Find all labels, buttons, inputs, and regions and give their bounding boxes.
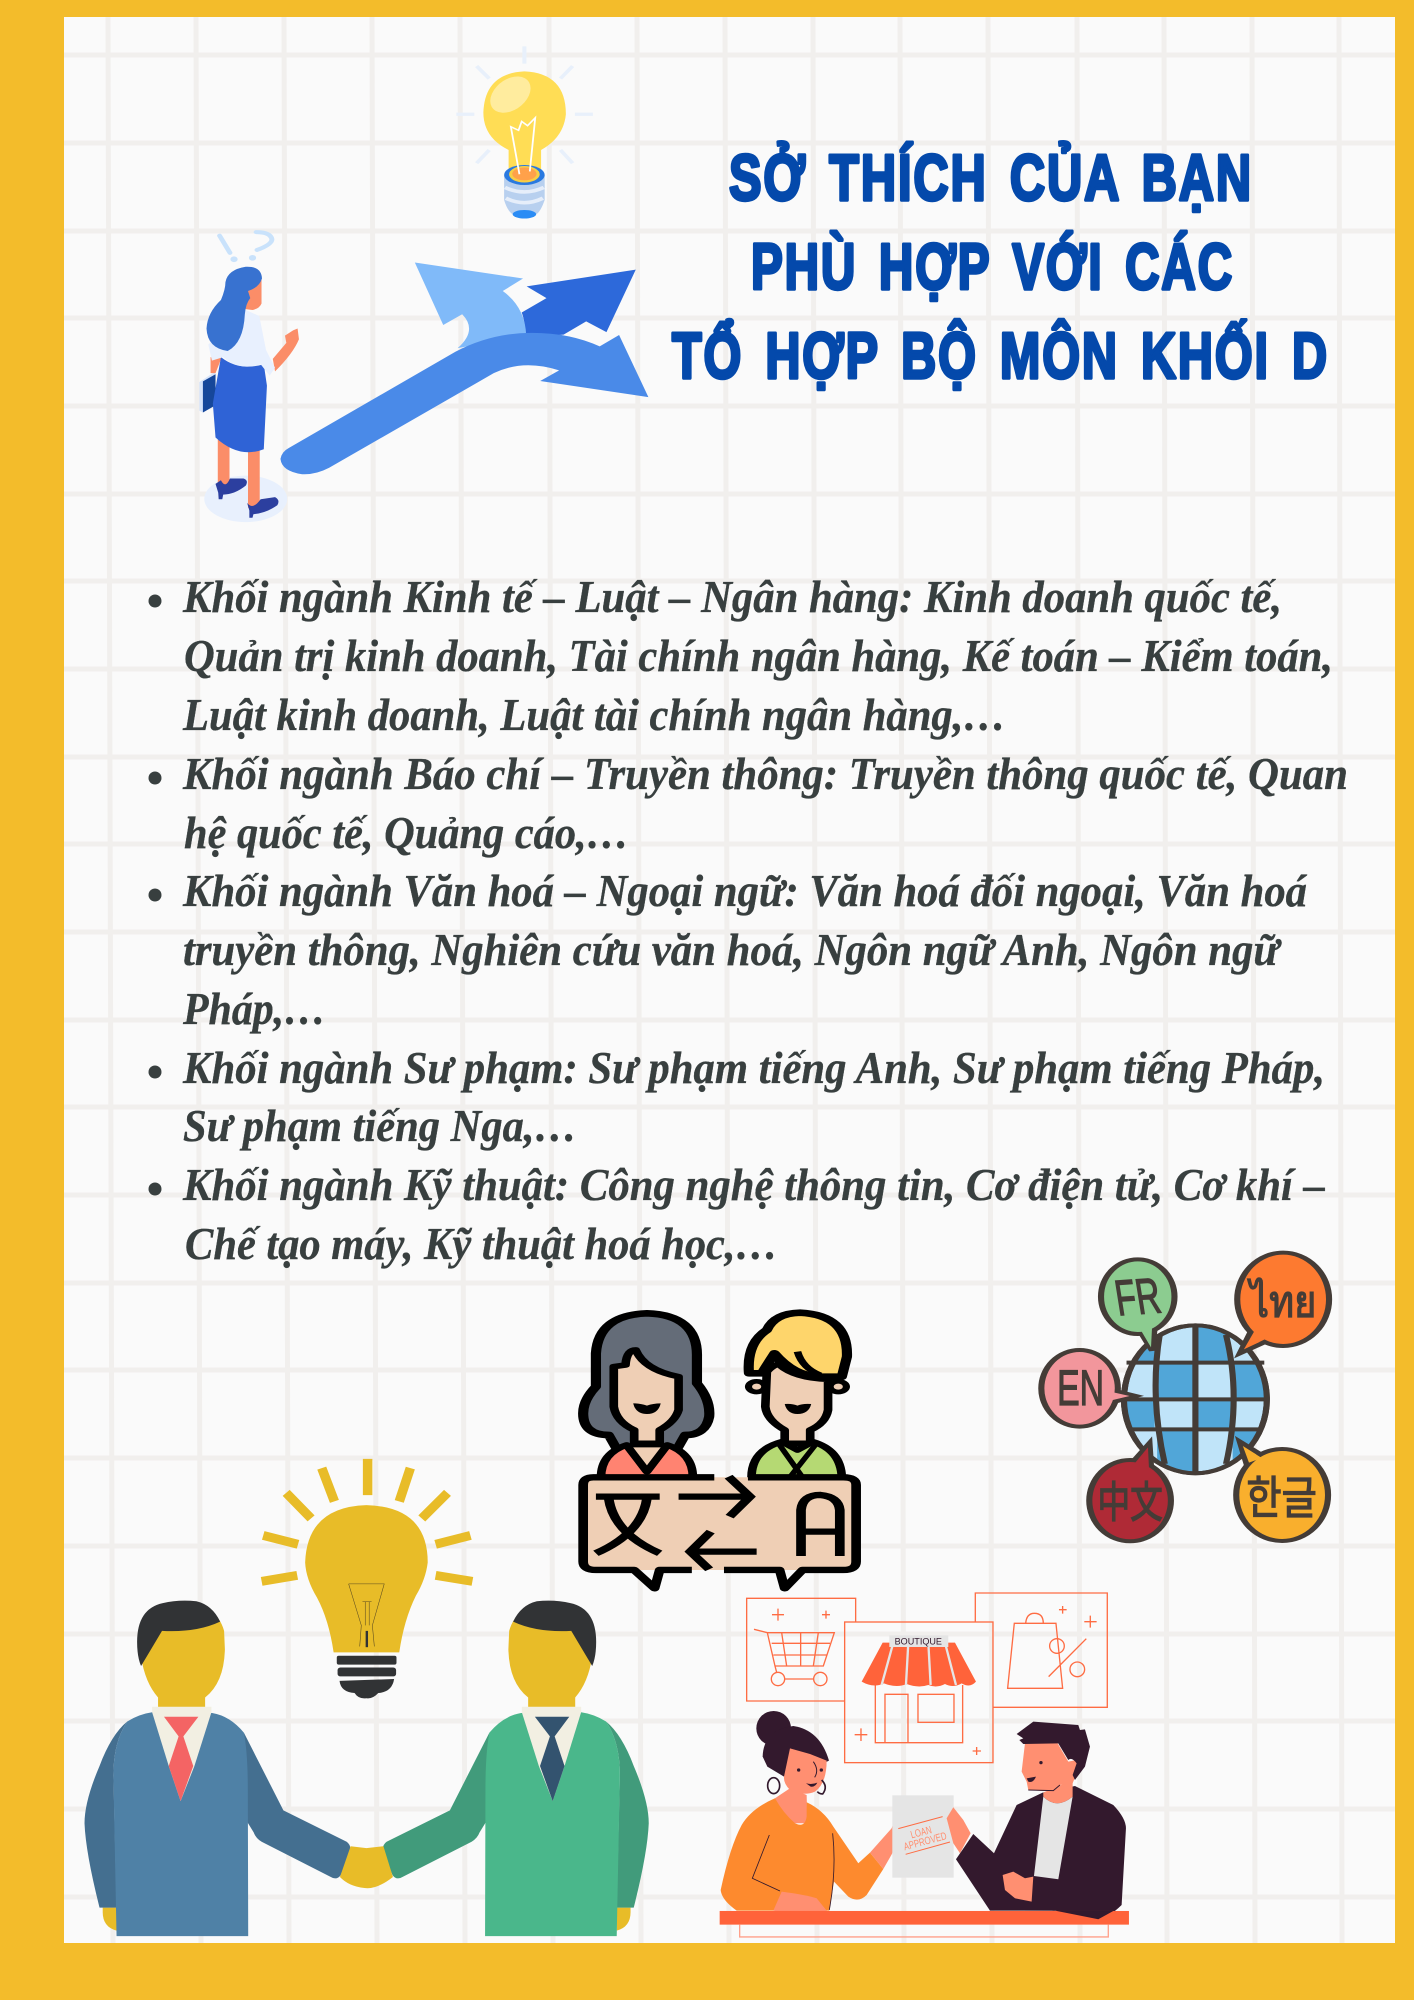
bubble: Thai <box>1237 1253 1329 1353</box>
icon: globe with language speech bubbles <box>1041 1253 1329 1541</box>
bubble: EN: EN <box>1057 1359 1104 1416</box>
list item: Sư phạm: Khối ngành Sư phạm: Sư phạm tiếng Anh, Sư phạm tiếng Pháp, <box>182 1042 1325 1093</box>
woman in orange <box>721 1711 903 1917</box>
title <box>672 141 1329 392</box>
bubble: Korean: 한글 <box>1246 1473 1317 1523</box>
bubble: Chinese: 中文 <box>1097 1478 1163 1527</box>
list item: Báo chí – Truyền thông: Khối ngành Báo chí – Truyền thông: Truyền thông quốc tế, Quan <box>182 748 1348 799</box>
shopping bag panel <box>975 1593 1107 1707</box>
table <box>720 1911 1129 1937</box>
bubble: FR: FR <box>1111 1267 1165 1326</box>
list item: Văn hoá – Ngoại ngữ: Khối ngành Văn hoá – Ngoại ngữ: Văn hoá đối ngoại, Văn hoá <box>182 865 1308 916</box>
bullet list of fields of study <box>148 571 1348 1269</box>
man in green suit <box>383 1601 649 1936</box>
list item: Văn hoá – Ngoại ngữ: Pháp,… <box>182 983 326 1034</box>
list item: Văn hoá – Ngoại ngữ <box>148 865 1308 1034</box>
list item: Kỹ thuật <box>148 1159 1325 1269</box>
shopping cart panel <box>747 1598 856 1701</box>
title: SỞ THÍCH CỦA BẠN <box>729 141 1253 214</box>
list item: Kinh tế – Luật – Ngân hàng: Quản trị kinh doanh, Tài chính ngân hàng, Kế toán – Kiểm toán, <box>184 630 1333 681</box>
illustration: boutique shop and loan approval meeting <box>720 1593 1129 1937</box>
icon: woman looking at arrows <box>199 232 299 522</box>
list item: Kinh tế – Luật – Ngân hàng <box>148 571 1333 740</box>
man in blue suit <box>85 1601 350 1936</box>
list item: Báo chí – Truyền thông <box>148 748 1348 858</box>
boutique panel <box>845 1622 993 1763</box>
illustration: two businessmen shaking hands <box>85 1601 649 1936</box>
icon: two people translating <box>583 1313 856 1588</box>
list item: Sư phạm: Sư phạm tiếng Nga,… <box>183 1100 577 1151</box>
title: PHÙ HỢP VỚI CÁC <box>751 230 1234 303</box>
bubble: Chinese <box>1089 1443 1171 1541</box>
list item: Kinh tế – Luật – Ngân hàng: Khối ngành Kinh tế – Luật – Ngân hàng: Kinh doanh quốc tế, <box>182 571 1282 622</box>
list item: Kỹ thuật: Chế tạo máy, Kỹ thuật hoá học,… <box>185 1218 778 1269</box>
document: loan approved: LOAN <box>909 1824 933 1841</box>
document: loan approved: APPROVED <box>902 1830 948 1853</box>
man in dark jacket <box>947 1722 1126 1919</box>
icon: large yellow light bulb <box>262 1459 472 1698</box>
bubble: FR <box>1101 1259 1174 1351</box>
list item: Báo chí – Truyền thông: hệ quốc tế, Quảng cáo,… <box>184 807 629 858</box>
bubble: EN <box>1041 1350 1136 1427</box>
document: loan approved <box>892 1795 954 1878</box>
list item: Kinh tế – Luật – Ngân hàng: Luật kinh doanh, Luật tài chính ngân hàng,… <box>182 689 1006 740</box>
list item: Văn hoá – Ngoại ngữ: truyền thông, Nghiên cứu văn hoá, Ngôn ngữ Anh, Ngôn ngữ <box>183 924 1282 975</box>
arrow: path forking in three directions <box>280 262 648 474</box>
globe <box>1124 1325 1267 1473</box>
icon: light bulb with rays (top) <box>456 46 593 219</box>
bubble: Thai: ไทย <box>1247 1277 1316 1326</box>
bubble: Korean <box>1236 1442 1328 1541</box>
handshake <box>340 1846 393 1888</box>
boutique panel: BOUTIQUE <box>895 1637 942 1647</box>
list item: Kỹ thuật: Khối ngành Kỹ thuật: Công nghệ thông tin, Cơ điện tử, Cơ khí – <box>182 1159 1325 1210</box>
list item: Sư phạm <box>148 1042 1325 1151</box>
